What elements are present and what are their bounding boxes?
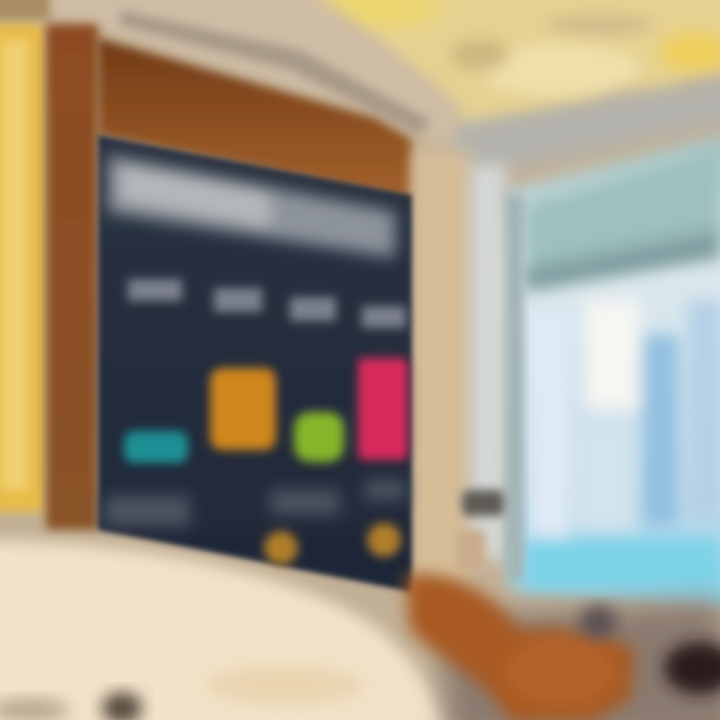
white window frame [470,165,506,560]
window upper band [525,150,720,280]
board title [108,155,395,258]
table dark object [102,692,142,720]
top left corner tone [0,0,50,20]
column labels [128,279,406,328]
table: cream round surface [0,540,450,720]
person silhouette [580,606,616,638]
cornice: cream moulding [30,0,460,150]
cornice shadow streak [120,10,430,135]
ceiling: golden coffers [290,0,720,135]
bar: teal [124,431,188,463]
wood pillar [46,24,98,530]
bar chart [124,358,408,463]
ceiling edge beam [445,78,720,175]
window transom [525,228,720,292]
cream column [414,150,470,580]
dark chair at right [664,642,720,694]
table object [205,665,365,705]
bar: green [294,412,344,462]
bar: crimson [358,358,408,460]
panel: yellow wall strip [0,24,44,512]
floor [440,600,720,720]
bar: orange [210,368,276,450]
board footer text [105,480,405,526]
chair: orange armchair [405,574,635,720]
window view [505,130,720,610]
infographic board [98,135,412,592]
footer icons [264,523,401,565]
window buildings [525,300,720,588]
window mullion [506,195,524,580]
dark table lamp [456,490,504,570]
wood header above board [98,38,412,200]
